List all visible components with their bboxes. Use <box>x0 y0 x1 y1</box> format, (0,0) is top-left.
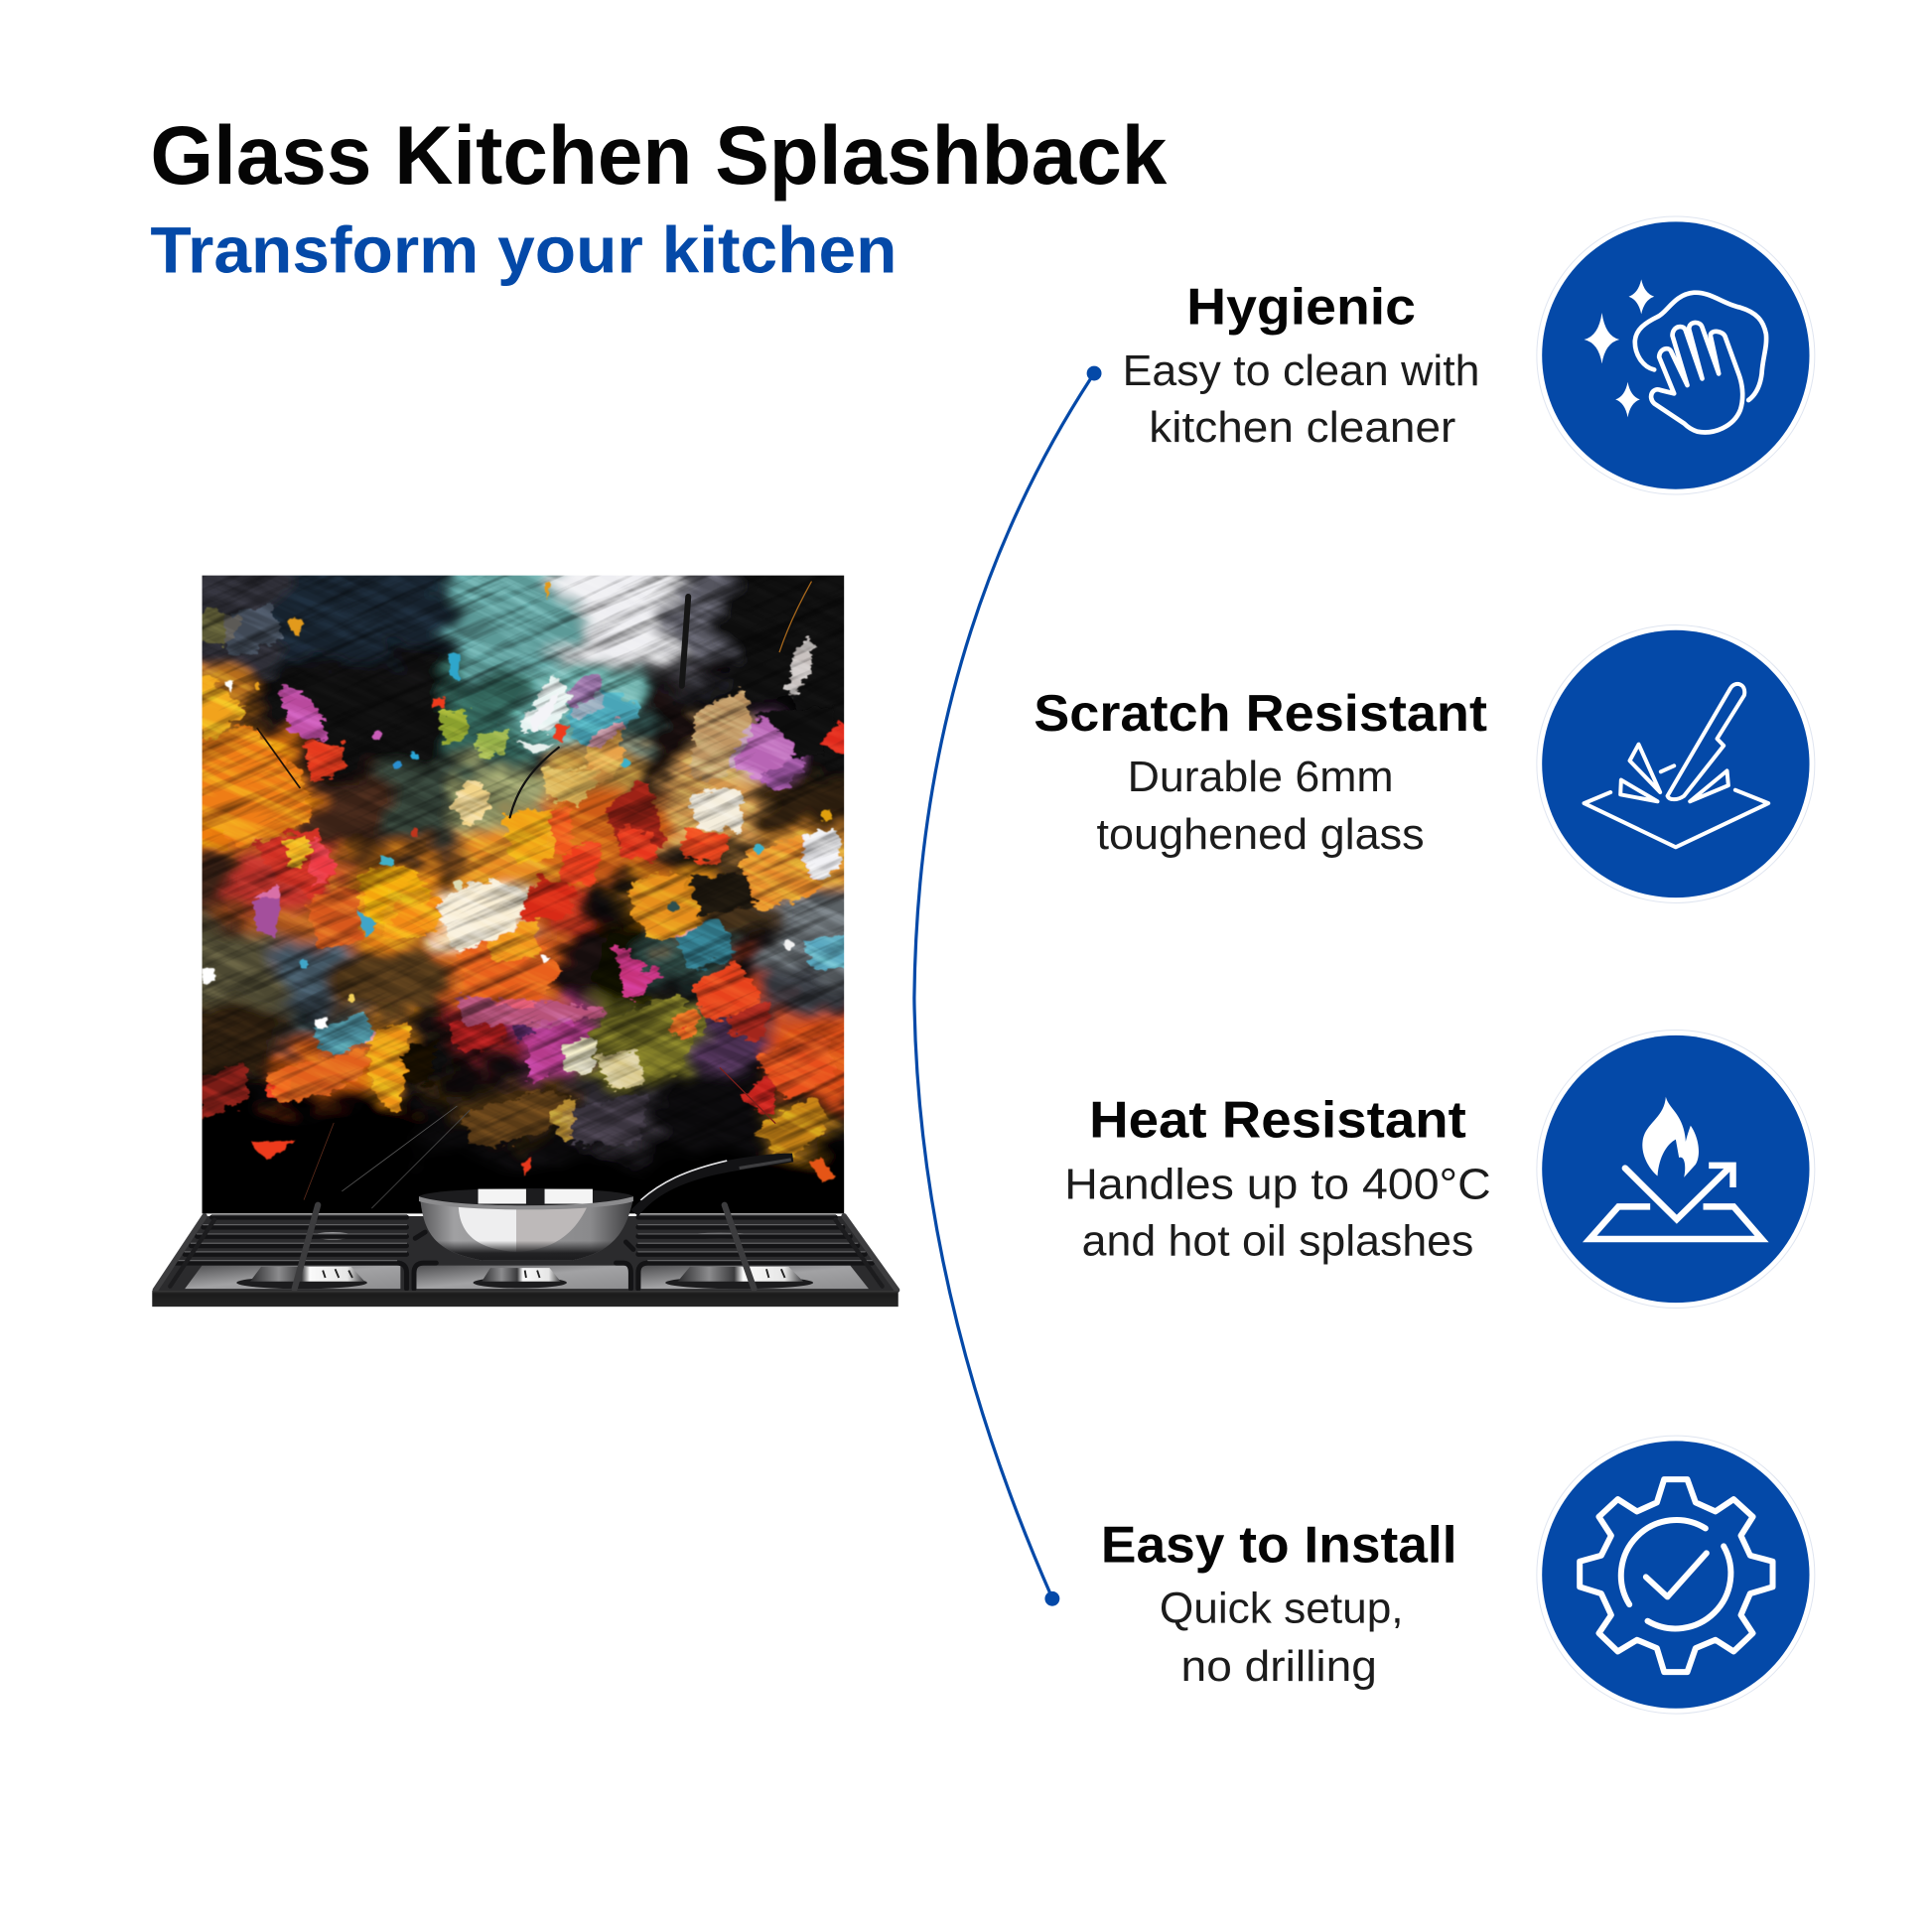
feature text: Heat Resistant: Handles up to 400°C <box>1064 1162 1491 1209</box>
feature text: Easy to Install <box>1101 1517 1457 1691</box>
feature text: Heat Resistant: and hot oil splashes <box>1082 1218 1473 1266</box>
subtitle: Transform your kitchen <box>150 212 897 286</box>
icon: gear with check mark <box>1537 1436 1815 1714</box>
painting: crisp details and splatter <box>203 582 835 1182</box>
hob front edge <box>152 1291 898 1307</box>
grates <box>155 1205 897 1290</box>
feature text: Hygienic: kitchen cleaner <box>1149 404 1455 452</box>
product image: splashback painting <box>203 576 844 1213</box>
feature text: Scratch Resistant: Durable 6mm <box>1128 754 1394 801</box>
steel burner windows <box>185 1266 869 1289</box>
title: Glass Kitchen Splashback <box>150 109 1168 202</box>
icon: knife scratching glass <box>1537 624 1815 902</box>
icon: hand wiping with sparkles <box>1537 216 1815 494</box>
painting: thin lines <box>257 582 811 1208</box>
pan <box>419 1188 633 1261</box>
feature text: Easy to Install: no drilling <box>1181 1643 1377 1691</box>
connector curve with end dots <box>914 366 1102 1606</box>
feature text: Heat Resistant <box>1064 1092 1491 1266</box>
painting: soft colour fields <box>203 576 844 1213</box>
product image: gas hob with pan <box>152 1154 898 1307</box>
feature text: Easy to Install: Quick setup, <box>1160 1585 1404 1632</box>
feature text: Easy to Install: Easy to Install <box>1101 1517 1457 1575</box>
painting: brush strokes <box>203 610 844 1153</box>
burners <box>236 1232 813 1289</box>
pan handle <box>630 1154 793 1216</box>
feature text: Scratch Resistant: Scratch Resistant <box>1034 685 1487 743</box>
hob top plate <box>153 1216 898 1293</box>
feature text: Hygienic <box>1123 278 1480 452</box>
feature text: Scratch Resistant <box>1034 685 1487 859</box>
feature text: Hygienic: Hygienic <box>1186 278 1416 336</box>
feature text: Scratch Resistant: toughened glass <box>1097 811 1425 859</box>
feature text: Hygienic: Easy to clean with <box>1123 347 1480 395</box>
feature text: Heat Resistant: Heat Resistant <box>1089 1092 1466 1150</box>
icon: flame on heat-resistant surface <box>1537 1031 1815 1309</box>
painting: highlight streaks <box>203 576 844 1172</box>
painting: brush texture streaks <box>203 576 844 1170</box>
